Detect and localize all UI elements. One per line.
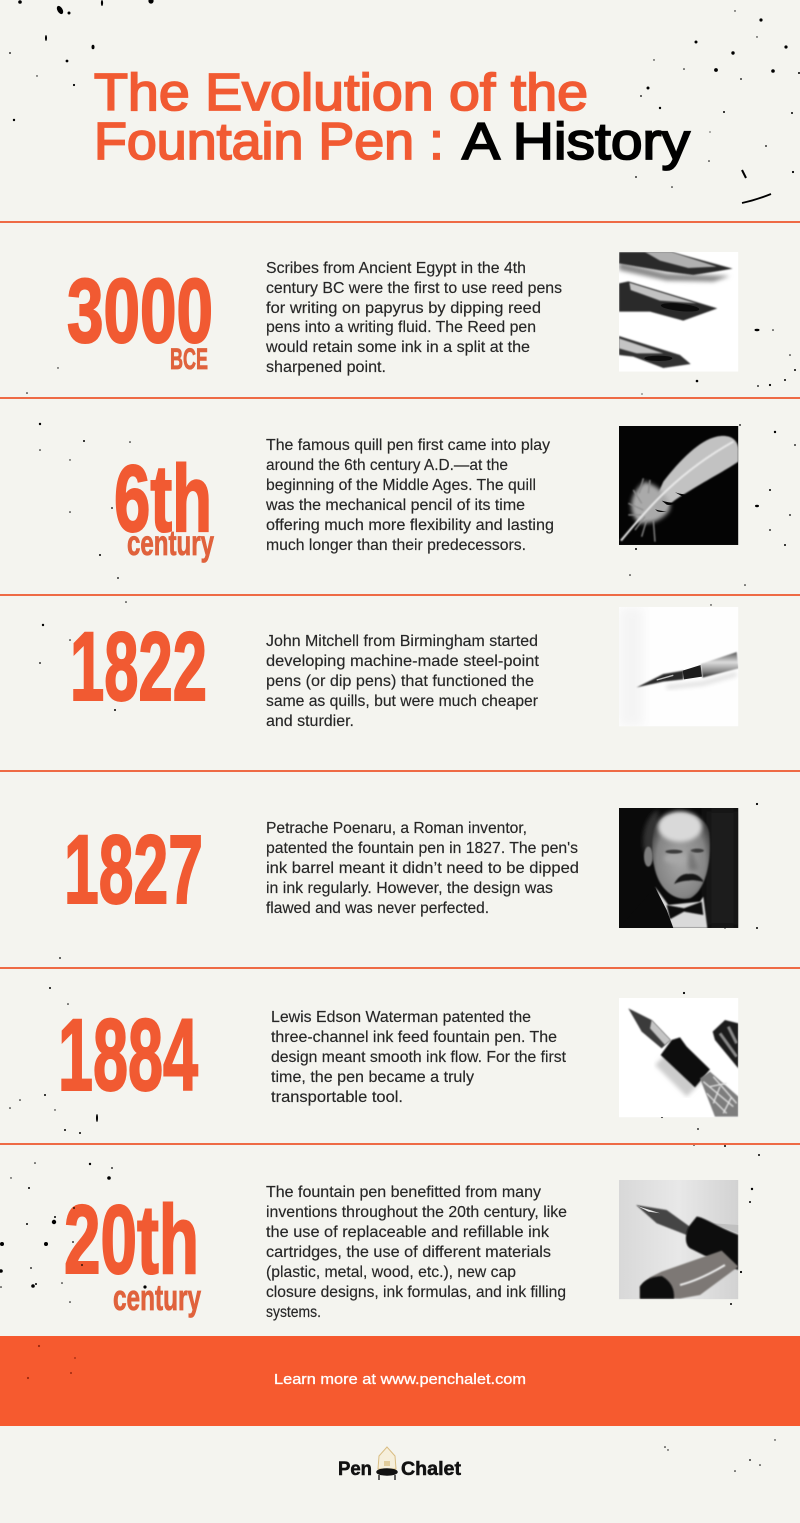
text: Lewis Edson Waterman: three-channel ink feed fountain pen. The [271, 1029, 557, 1046]
date: 3000 BCE: BCE [170, 343, 208, 376]
text: reed pens: sharpened point. [266, 359, 386, 376]
text: Lewis Edson Waterman: Lewis Edson Waterman patented the [271, 1009, 531, 1026]
text: reed pens: Scribes from Ancient Egypt in the 4th [266, 260, 526, 277]
image: portrait of Petrache Poenaru [619, 808, 738, 928]
title: The Evolution of the [94, 64, 588, 122]
text: reed pens: would retain some ink in a split at the [265, 339, 530, 356]
icon: chalet with ink pot [377, 1447, 397, 1480]
text: Lewis Edson Waterman: design meant smooth ink flow. For the first [271, 1049, 567, 1066]
panel: 3000 BCE [67, 252, 738, 376]
text: Lewis Edson Waterman [271, 1009, 567, 1106]
text: steel-point pens: pens (or dip pens) that functioned the [266, 673, 534, 690]
date: 20th century [64, 1185, 201, 1318]
text: 20th century inventions: systems. [266, 1304, 321, 1321]
text: steel-point pens: developing machine-made steel-point [266, 653, 540, 670]
title: Fountain Pen : [94, 113, 444, 171]
logo: Pen Chalet: Pen [338, 1459, 372, 1480]
text: quill pen: was the mechanical pencil of its time [265, 497, 525, 514]
text: quill pen: beginning of the Middle Ages. The quill [266, 477, 536, 494]
date: 6th century [114, 446, 214, 563]
text: reed pens: pens into a writing fluid. The Reed pen [266, 319, 536, 336]
date: 20th century: 20th [64, 1185, 199, 1294]
text: Petrache Poenaru: patented the fountain pen in 1827. The pen's [266, 840, 578, 857]
logo: Pen Chalet: Chalet [401, 1459, 462, 1480]
image: steel dip pen [619, 607, 739, 726]
image: modern fountain pen and cap [619, 1180, 738, 1299]
image: Waterman fountain pen [619, 998, 738, 1117]
date: 1822: 1822 [70, 612, 207, 721]
panel: 1884 [58, 998, 738, 1117]
date: 3000 BCE: 3000 [67, 261, 213, 362]
panel: 20th century [64, 1180, 738, 1321]
panel: 6th century [114, 426, 738, 563]
text: Petrache Poenaru: ink barrel meant it didn’t need to be dipped [266, 860, 579, 877]
text: quill pen: around the 6th century A.D.—at the [266, 457, 508, 474]
image: feather quill [619, 426, 738, 545]
date: 1827: 1827 [64, 815, 203, 924]
text: quill pen: The famous quill pen first came into play [266, 437, 550, 454]
panel: 1822 [70, 607, 739, 730]
text: Petrache Poenaru: Petrache Poenaru, a Roman inventor, [266, 820, 527, 837]
panel: 1827 [64, 808, 738, 928]
text: 20th century inventions: inventions throughout the 20th century, like [266, 1204, 567, 1221]
text: quill pen [265, 437, 554, 554]
text: quill pen: offering much more flexibility and lasting [266, 517, 554, 534]
text: reed pens: for writing on papyrus by dipping reed [266, 300, 541, 317]
text: Lewis Edson Waterman: time, the pen became a truly [271, 1069, 474, 1086]
text: 20th century inventions: The fountain pen benefitted from many [266, 1184, 541, 1201]
text: steel-point pens [266, 633, 540, 730]
text: steel-point pens: John Mitchell from Birmingham started [266, 633, 538, 650]
title: A History [462, 113, 690, 171]
image: reed pen nibs [619, 252, 738, 372]
text: reed pens [265, 260, 562, 376]
text: 20th century inventions: (plastic, metal, wood, etc.), new cap [266, 1264, 516, 1281]
text: reed pens: century BC were the first to use reed pens [266, 280, 562, 297]
text: steel-point pens: and sturdier. [266, 713, 354, 730]
text: steel-point pens: same as quills, but were much cheaper [266, 693, 539, 710]
date: 6th century: century [127, 524, 214, 563]
text: 20th century inventions: closure designs, ink formulas, and ink filling [266, 1284, 566, 1301]
text: 20th century inventions: the use of replaceable and refillable ink [266, 1224, 550, 1241]
text: quill pen: much longer than their predecessors. [266, 537, 526, 554]
footer banner [0, 1336, 800, 1426]
logo: Pen Chalet [338, 1447, 462, 1480]
footer link text: Learn more at www.penchalet.com [274, 1371, 526, 1388]
date: 20th century: century [113, 1277, 201, 1318]
date: 3000 BCE [67, 261, 213, 376]
text: Petrache Poenaru: flawed and was never perfected. [266, 900, 489, 917]
text: 20th century inventions: cartridges, the use of different materials [266, 1244, 551, 1261]
title [94, 64, 690, 171]
date: 6th century: 6th [114, 446, 212, 552]
date: 1884: 1884 [58, 998, 198, 1112]
text: Petrache Poenaru: in ink regularly. However, the design was [266, 880, 553, 897]
text: Petrache Poenaru [266, 820, 579, 917]
text: 20th century inventions [266, 1184, 567, 1321]
text: Lewis Edson Waterman: transportable tool. [271, 1089, 403, 1106]
